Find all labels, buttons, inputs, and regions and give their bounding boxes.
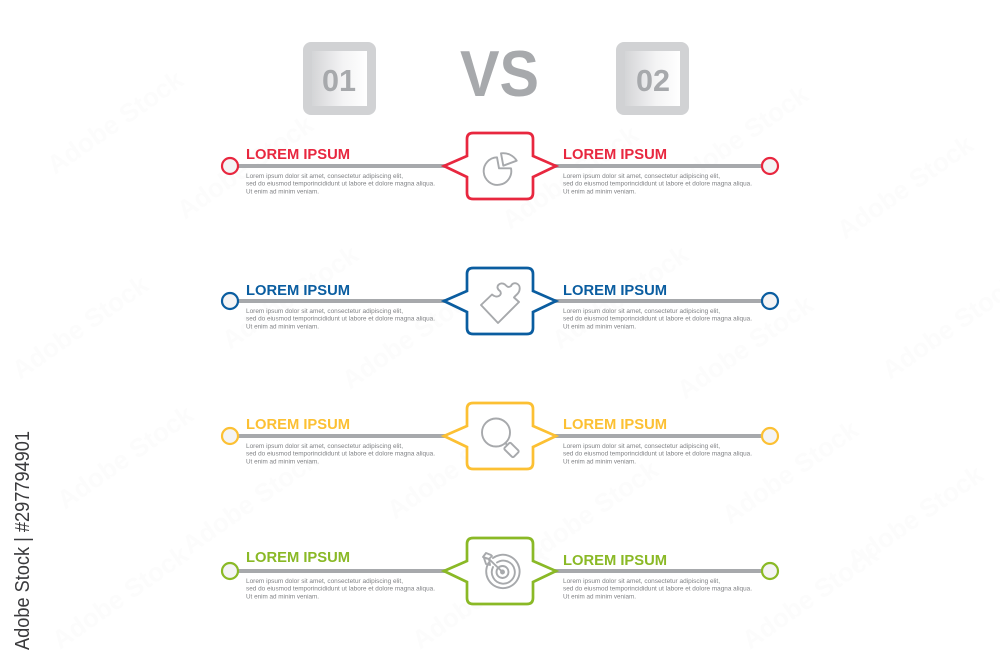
watermark pattern: Adobe Stock (51, 399, 199, 515)
right text block: sed do eiusmod temporincididunt ut labore et dolore magna aliqua. (563, 316, 752, 322)
watermark pattern: Adobe Stock (666, 79, 814, 195)
left text block: LOREM IPSUM (246, 147, 350, 163)
stock credit text: Adobe Stock | #297794901 (12, 431, 34, 650)
centre callout frame (444, 403, 556, 469)
right text block: Ut enim ad minim veniam. (563, 188, 636, 196)
watermark pattern: Adobe Stock (46, 539, 194, 655)
watermark pattern: Adobe Stock (336, 279, 484, 395)
left text block (246, 147, 435, 196)
right text block: LOREM IPSUM (563, 417, 667, 433)
watermark pattern: Adobe Stock (41, 64, 189, 180)
left text block: Ut enim ad minim veniam. (246, 324, 319, 330)
right marker (762, 563, 778, 579)
icon: magnifying glass (482, 418, 519, 458)
centre callout frame (444, 133, 556, 199)
right marker (762, 428, 778, 444)
left text block (246, 417, 435, 466)
row 4: green comparison (222, 538, 778, 604)
watermark pattern: Adobe Stock (716, 414, 864, 530)
left text block: Ut enim ad minim veniam. (246, 458, 319, 466)
left text block: Lorem ipsum dolor sit amet, consectetur adipiscing elit, (246, 173, 403, 180)
right text block: Lorem ipsum dolor sit amet, consectetur adipiscing elit, (563, 443, 720, 450)
right text block: Ut enim ad minim veniam. (563, 458, 636, 466)
right text block: LOREM IPSUM (563, 283, 667, 299)
watermark pattern: Adobe Stock (671, 289, 819, 405)
watermark pattern: Adobe Stock (516, 454, 664, 570)
watermark pattern: Adobe Stock (6, 269, 154, 385)
VS heading: VS (460, 37, 539, 110)
left text block: sed do eiusmod temporincididunt ut labore et dolore magna aliqua. (246, 316, 435, 322)
left text block: Ut enim ad minim veniam. (246, 594, 319, 600)
option 02 badge: 02 (636, 63, 670, 98)
watermark pattern: Adobe Stock (831, 129, 979, 245)
centre callout frame (444, 538, 556, 604)
left text block (246, 550, 435, 600)
right text block: sed do eiusmod temporincididunt ut labore et dolore magna aliqua. (563, 586, 752, 592)
watermark pattern: Adobe Stock (171, 109, 319, 225)
left text block: sed do eiusmod temporincididunt ut labore et dolore magna aliqua. (246, 450, 435, 458)
left text block: LOREM IPSUM (246, 283, 350, 299)
right text block (563, 283, 752, 330)
watermark pattern: Adobe Stock (841, 459, 989, 575)
row 2: blue comparison (222, 268, 778, 334)
left marker (222, 293, 238, 309)
right text block: Lorem ipsum dolor sit amet, consectetur adipiscing elit, (563, 308, 720, 315)
left text block: sed do eiusmod temporincididunt ut labore et dolore magna aliqua. (246, 180, 435, 188)
icon: puzzle piece (481, 283, 520, 323)
right text block (563, 553, 752, 600)
left text block (246, 283, 435, 330)
right text block: Lorem ipsum dolor sit amet, consectetur adipiscing elit, (563, 173, 720, 180)
right text block: LOREM IPSUM (563, 553, 667, 569)
row 3: yellow comparison (222, 403, 778, 469)
left marker (222, 563, 238, 579)
left text block: sed do eiusmod temporincididunt ut labore et dolore magna aliqua. (246, 586, 435, 592)
left text block: Lorem ipsum dolor sit amet, consectetur adipiscing elit, (246, 443, 403, 450)
watermark pattern: Adobe Stock (546, 239, 694, 355)
watermark pattern: Adobe Stock (496, 119, 644, 235)
left text block: LOREM IPSUM (246, 417, 350, 433)
right text block (563, 147, 752, 196)
right marker (762, 293, 778, 309)
watermark pattern: Adobe Stock (381, 409, 529, 525)
right marker (762, 158, 778, 174)
right text block: LOREM IPSUM (563, 147, 667, 163)
left text block: Lorem ipsum dolor sit amet, consectetur adipiscing elit, (246, 308, 403, 315)
watermark pattern: Adobe Stock (216, 239, 364, 355)
watermark pattern: Adobe Stock (406, 539, 554, 655)
option 02 badge (616, 42, 689, 115)
left marker (222, 158, 238, 174)
left marker (222, 428, 238, 444)
right text block (563, 417, 752, 466)
row 1: red comparison (222, 133, 778, 199)
centre callout frame (444, 268, 556, 334)
right text block: Ut enim ad minim veniam. (563, 324, 636, 330)
icon: pie chart (484, 153, 517, 185)
watermark pattern: Adobe Stock (176, 444, 324, 560)
right text block: sed do eiusmod temporincididunt ut labore et dolore magna aliqua. (563, 180, 752, 188)
left text block: Ut enim ad minim veniam. (246, 188, 319, 196)
right text block: sed do eiusmod temporincididunt ut labore et dolore magna aliqua. (563, 450, 752, 458)
left text block: LOREM IPSUM (246, 550, 350, 566)
left text block: Lorem ipsum dolor sit amet, consectetur adipiscing elit, (246, 578, 403, 585)
option 01 badge (303, 42, 376, 115)
option 01 badge: 01 (322, 63, 356, 98)
right text block: Lorem ipsum dolor sit amet, consectetur adipiscing elit, (563, 578, 720, 585)
right text block: Ut enim ad minim veniam. (563, 594, 636, 600)
watermark pattern: Adobe Stock (736, 539, 884, 655)
icon: target with arrow (483, 553, 520, 588)
